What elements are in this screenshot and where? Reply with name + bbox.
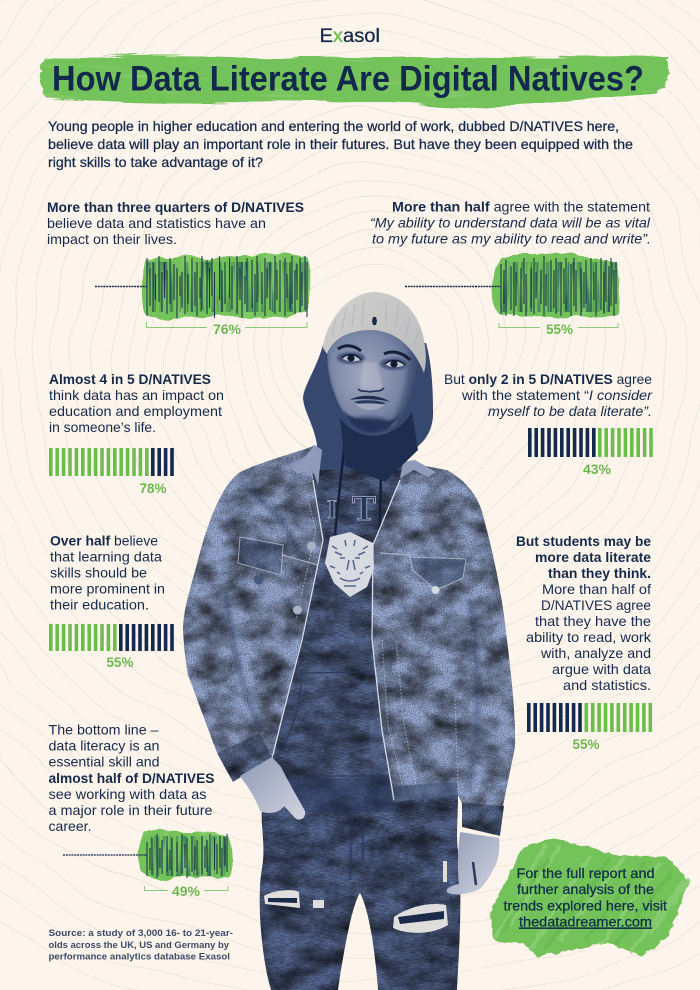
- right hand: [447, 832, 499, 894]
- photo: young man in denim jacket: [183, 292, 515, 990]
- hoodie: [272, 440, 402, 812]
- text: over half: [50, 534, 165, 612]
- source note: olds across the UK, US and Germany by: [48, 939, 230, 950]
- signal spikes: [147, 834, 227, 878]
- flat line lead-in: [63, 854, 147, 856]
- text: more than half: [370, 200, 651, 246]
- bracket: [146, 322, 307, 328]
- brows: [338, 346, 410, 360]
- eye sockets: [337, 352, 365, 364]
- text: over half: that learning data: [50, 550, 162, 564]
- text: almost 4 in 5: in someone’s life.: [49, 420, 156, 435]
- signal spikes: [147, 256, 307, 318]
- text: more data literate: More than half of: [542, 582, 651, 597]
- text: almost 4 in 5: [49, 372, 224, 435]
- text: more data literate: But students may be: [516, 534, 651, 549]
- text: bottom line: a major role in their future: [48, 803, 212, 818]
- title with green brush stroke: [40, 54, 669, 107]
- text: more data literate: [516, 534, 651, 693]
- hoodie lettering: T: [352, 488, 376, 528]
- jacket front edges: [273, 480, 400, 800]
- text: only 2 in 5: [444, 372, 653, 419]
- bracket: [499, 323, 618, 328]
- bar chart: 55% left: [49, 638, 174, 670]
- value: 55%: [546, 322, 573, 337]
- source note: Source: a study of 3,000 16- to 21-year-: [48, 927, 233, 938]
- text: more data literate: than they think.: [548, 566, 651, 581]
- text: more data literate: ability to read, work: [526, 630, 651, 645]
- flat line lead-in: [405, 286, 501, 288]
- value: 55%: [572, 737, 600, 752]
- text: almost 4 in 5: think data has an impact on: [49, 388, 224, 403]
- green brush blob: [142, 254, 312, 319]
- text: three quarters: impact on their lives.: [47, 232, 177, 247]
- text: three quarters: [47, 200, 304, 247]
- bracket: [144, 886, 228, 890]
- text: three quarters: More than three quarters of D/NATIVES: [47, 200, 304, 215]
- right cuff: [462, 802, 504, 836]
- face: [327, 330, 417, 434]
- text: over half: their education.: [50, 598, 149, 612]
- text: more data literate: argue with data: [552, 662, 651, 677]
- heading: How Data Literate Are Digital Natives?: [52, 58, 644, 98]
- text: bottom line: data literacy is an: [48, 738, 160, 754]
- green brush stroke: [490, 838, 690, 957]
- text: only 2 in 5: with the statement “ I consider: [461, 388, 653, 403]
- text: more than half: More than half agree with the statement: [392, 200, 650, 214]
- text: bottom line: see working with data as: [48, 787, 207, 802]
- drawstrings: [335, 440, 381, 575]
- tiger patch: [325, 532, 374, 597]
- intro paragraph: right skills to take advantage of it?: [48, 155, 263, 170]
- text: more data literate: more data literate: [535, 550, 651, 565]
- intro paragraph: Young people in higher education and entering the world of work, dubbed D/NATIVES here,: [48, 119, 619, 134]
- value: 43%: [583, 462, 611, 477]
- callout text: trends explored here, visit: [504, 898, 667, 914]
- text: more data literate: and statistics.: [563, 678, 651, 693]
- eyes: [342, 355, 405, 367]
- neck shadow: [340, 412, 418, 482]
- text: more data literate: D/NATIVES agree: [541, 598, 651, 613]
- intro paragraph: [48, 119, 633, 170]
- green brush blob: [138, 831, 231, 879]
- moustache and mouth: [350, 396, 390, 402]
- bar chart: 78%: [49, 462, 174, 496]
- text: more data literate: with, analyze and: [540, 646, 651, 661]
- text: only 2 in 5: But only 2 in 5 D/NATIVES agree: [444, 372, 652, 387]
- text: bottom line: [48, 722, 214, 834]
- flat line lead-in: [95, 286, 147, 288]
- beanie logo: [372, 317, 377, 325]
- text: almost 4 in 5: Almost 4 in 5 D/NATIVES: [49, 372, 211, 387]
- value: 49%: [172, 884, 200, 899]
- jacket collar: [293, 445, 436, 485]
- beanie: [323, 292, 426, 373]
- bar chart: 43%: [528, 442, 653, 477]
- placket stitching: [296, 500, 458, 795]
- hood: [303, 343, 433, 500]
- waveform chart: 49%: [63, 831, 231, 899]
- text: bottom line: essential skill and: [48, 754, 160, 770]
- callout text: [504, 866, 667, 930]
- green brush blob: [493, 254, 620, 319]
- text: bottom line: The bottom line –: [48, 722, 159, 738]
- text: bottom line: almost half of D/NATIVES: [48, 771, 214, 786]
- value: 76%: [213, 322, 241, 337]
- text: over half: skills should be: [50, 566, 147, 580]
- value: 78%: [140, 481, 166, 496]
- source note: performance analytics database Exasol: [48, 950, 230, 962]
- pocket right: [410, 557, 466, 590]
- buttons: [307, 542, 316, 550]
- hoodie: I: [327, 495, 337, 524]
- beard shadow: [342, 410, 400, 428]
- brush stroke behind title: [40, 54, 669, 107]
- left hand in pocket: [240, 757, 305, 820]
- intro paragraph: believe data will play an important role in their futures. But have they been equipped with the: [48, 137, 633, 152]
- jacket: [183, 445, 515, 836]
- waveform chart: 76%: [95, 254, 312, 337]
- text: over half: more prominent in: [50, 582, 165, 596]
- text: more than half: to my future as my ability to read and write”.: [372, 232, 651, 246]
- jacket fold shadows: [226, 480, 477, 790]
- text: over half: Over half believe: [50, 534, 158, 548]
- callout: full report: [490, 838, 690, 957]
- callout text: thedatadreamer.com: [519, 914, 652, 930]
- text: only 2 in 5: myself to be data literate”.: [488, 404, 652, 419]
- text: more than half: “My ability to understand data will be as vital: [370, 216, 651, 230]
- callout text: For the full report and: [516, 866, 654, 881]
- face side shadow: [328, 352, 420, 422]
- callout text: further analysis of the: [517, 882, 654, 897]
- rips in jeans: [264, 861, 448, 933]
- jeans: [260, 795, 460, 990]
- logo: Exasol: Exasol: [320, 25, 380, 47]
- waveform chart: 55%: [405, 254, 620, 337]
- text: three quarters: believe data and statistics have an: [47, 216, 266, 231]
- jacket waistband: [393, 782, 458, 802]
- source note: [48, 927, 233, 962]
- signal spikes: [501, 256, 616, 316]
- value: 55%: [106, 655, 134, 670]
- text: more data literate: that they have the: [535, 614, 651, 629]
- left cuff: [217, 733, 272, 782]
- bar chart: 55% right: [527, 718, 653, 752]
- pocket left: [238, 537, 283, 575]
- text: bottom line: career.: [48, 819, 92, 834]
- text: almost 4 in 5: education and employment: [49, 404, 222, 419]
- nose: [361, 362, 383, 391]
